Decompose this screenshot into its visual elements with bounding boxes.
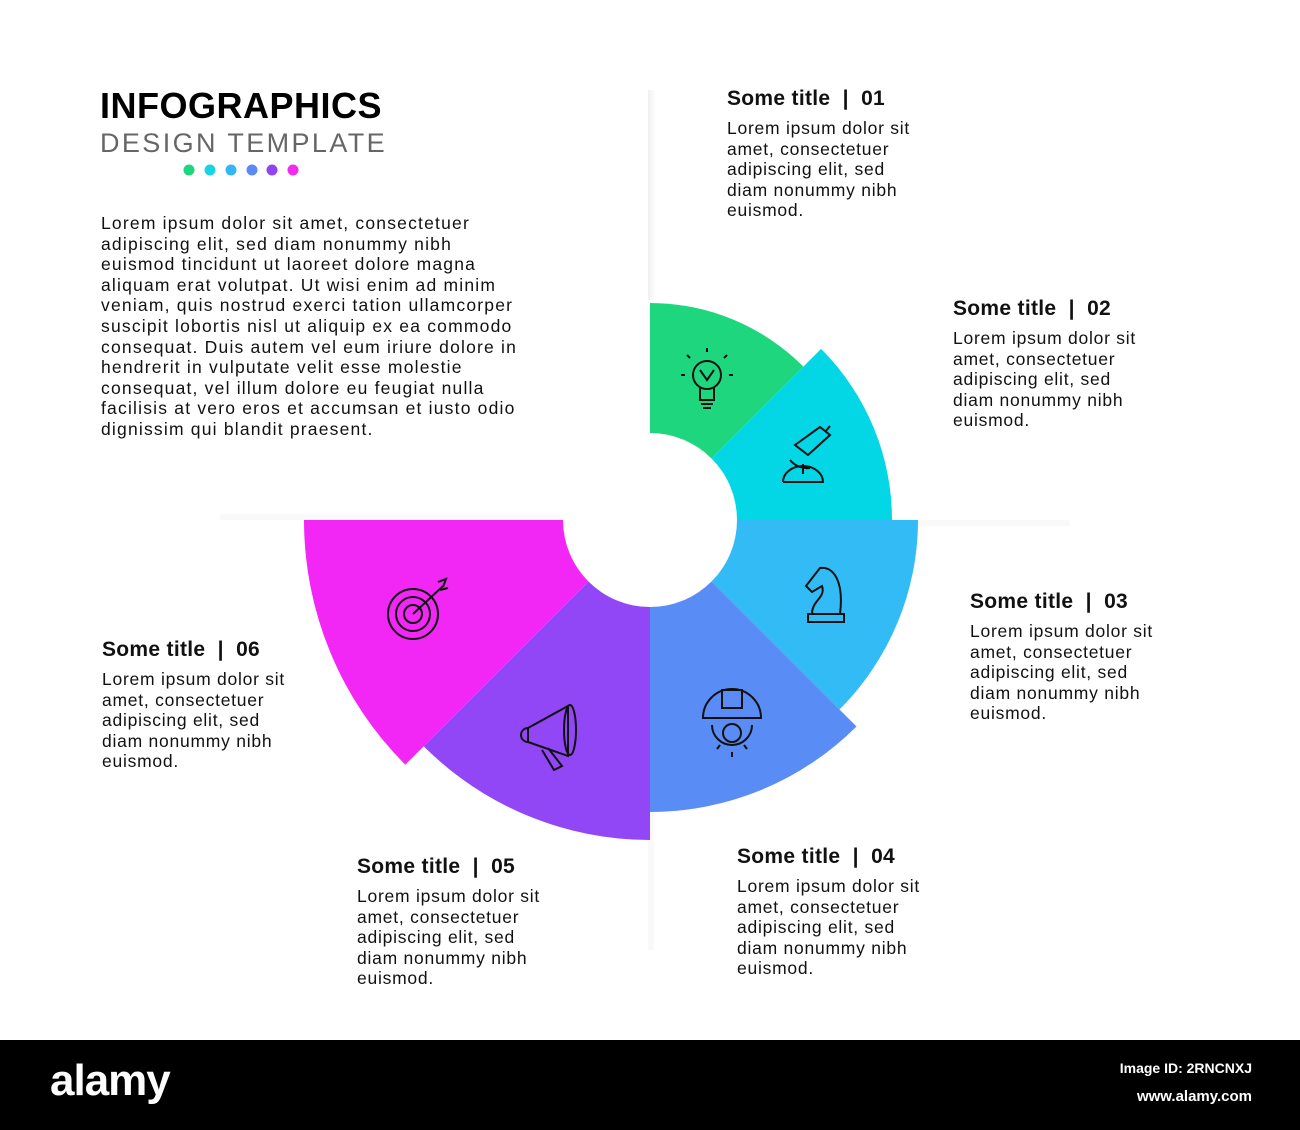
item 06	[102, 638, 285, 771]
footer bar: www.alamy.com	[1137, 1088, 1252, 1105]
title: DESIGN TEMPLATE	[100, 128, 387, 158]
intro text: hendrerit in vulputate velit esse molestie	[101, 357, 463, 377]
icon: target	[388, 579, 448, 639]
sector 2	[650, 349, 892, 520]
icon: helmet gear	[703, 689, 761, 757]
intro text: euismod tincidunt ut laoreet dolore magna	[101, 254, 476, 274]
item 01: amet, consectetuer	[727, 139, 889, 159]
icon: chess knight	[806, 568, 844, 622]
footer bar: alamy	[50, 1056, 170, 1105]
item 03: adipiscing elit, sed	[970, 662, 1128, 682]
intro text: facilisis at vero eros et accumsan et iusto odio	[101, 398, 516, 418]
intro text: suscipit lobortis nisl ut aliquip ex ea commodo	[101, 316, 512, 336]
title	[100, 85, 387, 158]
item 02: amet, consectetuer	[953, 349, 1115, 369]
item 05	[357, 855, 540, 988]
item 06: amet, consectetuer	[102, 690, 264, 710]
item 04: adipiscing elit, sed	[737, 917, 895, 937]
item 01: adipiscing elit, sed	[727, 159, 885, 179]
dots	[184, 164, 298, 176]
item 03: amet, consectetuer	[970, 642, 1132, 662]
intro text: aliquam erat volutpat. Ut wisi enim ad minim	[101, 275, 496, 295]
item 05: Lorem ipsum dolor sit	[357, 886, 540, 906]
item 06: diam nonummy nibh	[102, 731, 272, 751]
item 04: diam nonummy nibh	[737, 938, 907, 958]
item 03: diam nonummy nibh	[970, 683, 1140, 703]
item 03	[970, 590, 1153, 723]
intro text: veniam, quis nostrud exerci tation ullamcorper	[101, 295, 513, 315]
sector 3	[650, 520, 918, 710]
item 01: diam nonummy nibh	[727, 180, 897, 200]
item 06: euismod.	[102, 751, 179, 771]
item 05: adipiscing elit, sed	[357, 927, 515, 947]
sector 6	[304, 520, 650, 765]
intro text: Lorem ipsum dolor sit amet, consectetuer	[101, 213, 470, 233]
icon: bulb	[681, 348, 733, 408]
item 03: Lorem ipsum dolor sit	[970, 621, 1153, 641]
item 04: Lorem ipsum dolor sit	[737, 876, 920, 896]
item 02: Lorem ipsum dolor sit	[953, 328, 1136, 348]
intro text: consequat, vel illum dolore eu feugiat nulla	[101, 378, 485, 398]
item 05: amet, consectetuer	[357, 907, 519, 927]
item 01: Some title | 01	[727, 87, 885, 110]
item 05: euismod.	[357, 968, 434, 988]
item 04: Some title | 04	[737, 845, 895, 868]
item 04: amet, consectetuer	[737, 897, 899, 917]
item 02: diam nonummy nibh	[953, 390, 1123, 410]
intro text: consequat. Duis autem vel eum iriure dolore in	[101, 337, 517, 357]
center circle	[563, 433, 737, 607]
item 02: Some title | 02	[953, 297, 1111, 320]
sector 5	[424, 520, 650, 840]
item 02: euismod.	[953, 410, 1030, 430]
item 05: Some title | 05	[357, 855, 515, 878]
sector 4	[650, 520, 856, 812]
title: INFOGRAPHICS	[100, 85, 382, 126]
item 01	[727, 87, 910, 220]
item 01: Lorem ipsum dolor sit	[727, 118, 910, 138]
item 06: Lorem ipsum dolor sit	[102, 669, 285, 689]
item 04: euismod.	[737, 958, 814, 978]
item 01: euismod.	[727, 200, 804, 220]
sector 1	[650, 303, 803, 520]
item 05: diam nonummy nibh	[357, 948, 527, 968]
intro text: adipiscing elit, sed diam nonummy nibh	[101, 234, 452, 254]
item 02	[953, 297, 1136, 430]
icon: microscope	[783, 426, 830, 482]
footer bar	[0, 1040, 1300, 1130]
item 02: adipiscing elit, sed	[953, 369, 1111, 389]
intro text	[101, 213, 517, 439]
footer bar: Image ID: 2RNCNXJ	[1120, 1060, 1252, 1076]
item 06: adipiscing elit, sed	[102, 710, 260, 730]
icon: megaphone	[521, 705, 576, 770]
item 04	[737, 845, 920, 978]
item 03: euismod.	[970, 703, 1047, 723]
item 03: Some title | 03	[970, 590, 1128, 613]
item 06: Some title | 06	[102, 638, 260, 661]
intro text: dignissim qui blandit praesent.	[101, 419, 374, 439]
